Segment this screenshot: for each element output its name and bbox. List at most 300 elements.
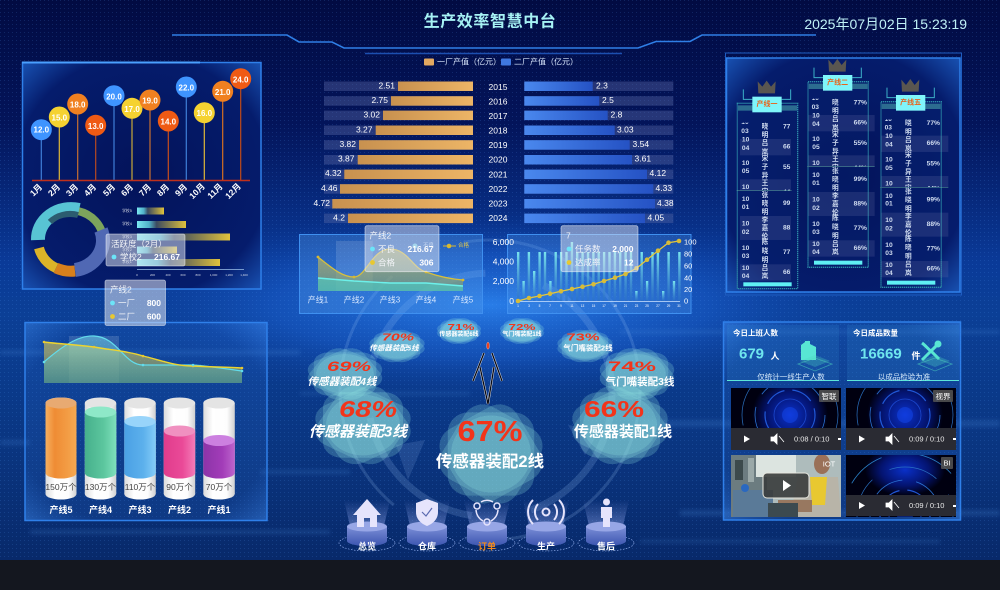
ranking column 2: 陈 bbox=[832, 213, 839, 222]
tooltip: day 7 tasks: 达成率 bbox=[575, 258, 601, 268]
cloud: 传感器装配3线 bbox=[308, 380, 418, 470]
nav: 生产: 生产 bbox=[537, 540, 555, 552]
ranking column 1: 伦 bbox=[762, 231, 769, 240]
ranking column 1: 宋 bbox=[762, 186, 769, 195]
ranking column 3: 03 bbox=[885, 124, 892, 131]
cylinders: 产线4 bbox=[89, 504, 112, 515]
tooltip: activity: 216.67 bbox=[154, 252, 180, 262]
ranking column 3: 吕 bbox=[905, 260, 912, 268]
school bars: 学校5 bbox=[122, 208, 132, 213]
stat card: staff on duty: 679 bbox=[739, 346, 764, 362]
ranking column 1 bbox=[737, 81, 798, 289]
cylinders bbox=[45, 398, 235, 515]
ranking column 2: 03 bbox=[812, 104, 819, 111]
video: BI: BI bbox=[943, 458, 951, 468]
tooltip: 产线2 quality: 不良 bbox=[378, 244, 396, 254]
ranking column 2 bbox=[807, 59, 875, 267]
cloud: 传感器装配1线: 传感器装配1线 bbox=[574, 422, 672, 440]
date and time: 2025年07月02日 15:23:19 bbox=[804, 16, 967, 32]
ranking column 2: 明 bbox=[832, 184, 839, 192]
butterfly bar chart: 4.38 bbox=[657, 198, 674, 208]
ranking column 2: 张 bbox=[832, 166, 839, 175]
panel: defect line chart: 产线2 bbox=[344, 294, 365, 304]
cloud: 气门嘴装配2线: 73% bbox=[566, 332, 600, 344]
ranking column 2: 66% bbox=[854, 245, 867, 252]
tooltip: 产线2 plants: 二厂 bbox=[118, 312, 135, 322]
ranking column 2: 王 bbox=[832, 155, 839, 163]
panel: line rankings bbox=[726, 53, 962, 295]
butterfly bar chart: 2015 bbox=[489, 82, 508, 92]
cloud: 传感器装配5线: 70% bbox=[382, 332, 414, 344]
butterfly bar chart: 4.2 bbox=[333, 212, 345, 222]
ranking column 1: 03 bbox=[742, 253, 750, 260]
lollipop chart: 18.0 bbox=[70, 100, 86, 110]
ranking column 3: 异 bbox=[905, 168, 912, 176]
cloud: 气门嘴装配3线: 74% bbox=[608, 358, 657, 374]
nav: 生产 bbox=[518, 500, 574, 552]
lollipop chart: 20.0 bbox=[106, 92, 122, 102]
ranking column 2: 晓 bbox=[832, 175, 839, 183]
nav: 售后: 售后 bbox=[597, 540, 615, 552]
ranking column 1: 02 bbox=[742, 229, 750, 236]
ranking column 1: 10 bbox=[742, 184, 750, 191]
ranking column 3: 44% bbox=[927, 185, 940, 192]
ranking column 1: 子 bbox=[762, 163, 769, 171]
tooltip: activity: 活跃度（2月） bbox=[111, 239, 167, 249]
school bars: 800 bbox=[195, 273, 201, 277]
panel: tasks bar and line chart: 0 bbox=[509, 296, 514, 306]
stat card: finished goods: 16669 bbox=[860, 346, 902, 362]
panel: daily stats and videos bbox=[722, 321, 962, 521]
ranking column 1: 10 bbox=[742, 245, 750, 252]
panel: tasks bar and line chart: 17 bbox=[602, 304, 606, 308]
panel: defect line chart: 产线4 bbox=[416, 294, 437, 304]
ranking column 2: 宋 bbox=[832, 129, 839, 138]
tooltip: 产线2 quality: 216.67 bbox=[408, 244, 434, 254]
ranking column 1: 岚 bbox=[762, 148, 769, 156]
stat card: staff on duty: 人 bbox=[770, 351, 780, 361]
ranking column 3: 嘉 bbox=[905, 219, 912, 228]
school bars: 学校4 bbox=[122, 221, 132, 226]
tooltip: activity bbox=[106, 234, 185, 266]
panel: tasks bar and line chart bbox=[493, 234, 697, 314]
panel: tasks bar and line chart: 20 bbox=[684, 285, 692, 294]
school bars: 1,000 bbox=[210, 273, 218, 277]
ranking column 1: 张 bbox=[762, 190, 769, 199]
tooltip: 产线2 quality: 合格 bbox=[378, 258, 396, 268]
butterfly bar chart: 4.12 bbox=[650, 168, 666, 178]
ranking column 3: 10 bbox=[885, 217, 893, 224]
tooltip: day 7 tasks bbox=[561, 226, 638, 272]
ranking column 2: 02 bbox=[812, 205, 820, 212]
panel: tasks bar and line chart: 2,000 bbox=[493, 276, 514, 286]
nav: 仓库 bbox=[399, 499, 455, 552]
butterfly bar chart bbox=[313, 80, 674, 223]
lollipop chart: 15.0 bbox=[52, 114, 68, 122]
ranking column 1: 10 bbox=[742, 136, 750, 143]
butterfly bar chart: 4.33 bbox=[656, 183, 672, 193]
butterfly bar chart: 2021 bbox=[489, 170, 508, 180]
panel: tasks bar and line chart: 23 bbox=[635, 304, 638, 308]
ranking column 1: 明 bbox=[762, 208, 769, 216]
ranking column 3: 晓 bbox=[905, 243, 912, 251]
panel: tasks bar and line chart: 5 bbox=[539, 304, 541, 308]
panel: tasks bar and line chart: 21 bbox=[624, 304, 627, 308]
butterfly bar chart: 3.27 bbox=[356, 124, 373, 134]
butterfly bar chart: 2.75 bbox=[371, 95, 388, 105]
ranking column 3: 99% bbox=[927, 196, 940, 203]
cylinders: 90万个 bbox=[166, 482, 193, 492]
ranking column 2: 99% bbox=[854, 176, 867, 183]
panel: tasks bar and line chart: 100 bbox=[684, 238, 697, 246]
title: 生产效率智慧中台 bbox=[424, 12, 556, 30]
ranking column 3: 李 bbox=[905, 211, 912, 220]
ranking column 3: 岚 bbox=[905, 269, 912, 277]
school bars: 学校1 bbox=[122, 259, 132, 264]
panel: defect line chart: 不良 bbox=[423, 241, 435, 249]
lollipop chart: 2月 bbox=[46, 182, 62, 198]
video: 视界: 0:09 / 0:10 bbox=[909, 434, 944, 444]
header lines bbox=[172, 35, 816, 54]
ranking column 1: 05 bbox=[742, 168, 750, 175]
lollipop chart: 12月 bbox=[223, 181, 243, 201]
butterfly bar chart: 3.02 bbox=[363, 110, 380, 120]
cylinders: 产线2 bbox=[168, 504, 191, 515]
ranking column 1: 66 bbox=[783, 269, 791, 276]
tooltip: 产线2 quality: 产线2 bbox=[370, 230, 392, 240]
ranking column 3: 子 bbox=[905, 159, 912, 167]
butterfly bar chart: 2016 bbox=[489, 96, 508, 106]
butterfly bar chart: 3.61 bbox=[634, 154, 651, 164]
stat card: staff on duty bbox=[727, 325, 839, 382]
cloud: 气门嘴装配2线: 气门嘴装配2线 bbox=[563, 342, 613, 352]
ranking column 2: 明 bbox=[832, 232, 839, 240]
butterfly bar chart: 2.51 bbox=[378, 80, 395, 90]
stat card: finished goods: 件 bbox=[911, 350, 921, 361]
ranking column 2: 10 bbox=[812, 95, 819, 102]
ranking column 1: 04 bbox=[742, 145, 750, 152]
ranking column 2: 10 bbox=[812, 221, 820, 228]
panel: production lines bbox=[25, 322, 267, 520]
lollipop chart: 19.0 bbox=[142, 96, 158, 106]
butterfly bar chart: 2.8 bbox=[610, 110, 623, 120]
cylinders: 70万个 bbox=[206, 482, 233, 492]
ranking column 3: 岚 bbox=[905, 144, 912, 152]
nav: 总览 bbox=[339, 499, 395, 552]
stat card: finished goods: 以成品检验为准 bbox=[878, 372, 931, 382]
lollipop chart: 11月 bbox=[205, 181, 225, 201]
tooltip: day 7 tasks: 任务数 bbox=[575, 244, 601, 254]
butterfly bar chart: 2018 bbox=[489, 126, 508, 136]
cloud: 气门嘴装配1线 bbox=[497, 316, 547, 346]
ranking column 3: 10 bbox=[885, 262, 893, 269]
ranking column 1: 88 bbox=[783, 224, 791, 231]
ranking column 1: 晓 bbox=[762, 247, 769, 255]
tooltip: 产线2 plants: 800 bbox=[147, 298, 161, 308]
ranking column 3: 10 bbox=[885, 180, 893, 187]
cloud: 传感器装配2线: 传感器装配2线 bbox=[436, 451, 545, 471]
butterfly bar chart: 3.82 bbox=[339, 139, 356, 149]
ranking column 3: 王 bbox=[905, 175, 912, 183]
panel: tasks bar and line chart: 15 bbox=[592, 304, 595, 308]
ranking column 2: 岚 bbox=[832, 248, 839, 256]
tooltip: day 7 tasks: 2,000 bbox=[612, 244, 634, 254]
cylinders: 130万个 bbox=[85, 482, 117, 492]
lollipop chart: 6月 bbox=[119, 182, 135, 198]
butterfly bar chart: 3.03 bbox=[617, 124, 634, 134]
ranking column 2: 88% bbox=[854, 200, 867, 207]
panel: tasks bar and line chart: 0 bbox=[684, 296, 688, 306]
lollipop chart: 3月 bbox=[64, 182, 80, 198]
butterfly bar chart: 3.87 bbox=[338, 154, 355, 164]
ranking column 2: 10 bbox=[812, 196, 820, 203]
ranking column 3: 产线五 bbox=[900, 97, 921, 106]
cloud: 传感器装配4线: 传感器装配4线 bbox=[308, 376, 378, 388]
panel: tasks bar and line chart: 40 bbox=[684, 274, 692, 282]
butterfly bar chart: 2.3 bbox=[596, 80, 608, 90]
ranking column 1: 10 bbox=[742, 196, 750, 203]
ranking column 1: 10 bbox=[741, 119, 749, 126]
ranking column 1: 10 bbox=[742, 160, 750, 167]
ranking column 3: 宋 bbox=[905, 183, 912, 192]
cylinders: 产线1 bbox=[207, 504, 231, 515]
cylinders: 110万个 bbox=[125, 482, 156, 492]
panel: tasks bar and line chart: 25 bbox=[645, 304, 649, 308]
butterfly bar chart: 2020 bbox=[489, 154, 508, 164]
butterfly bar chart: 4.05 bbox=[648, 212, 664, 222]
school bars: 200 bbox=[150, 273, 155, 277]
lollipop chart: 24.0 bbox=[233, 76, 249, 84]
stat card: staff on duty: 仅统计一线生产人数 bbox=[757, 372, 825, 382]
ranking column 1: 明 bbox=[762, 131, 769, 139]
panel: tasks bar and line chart: 19 bbox=[613, 304, 617, 308]
ranking column 2: 异 bbox=[832, 147, 839, 155]
nav: 订单: 订单 bbox=[478, 540, 496, 552]
ranking column 2: 03 bbox=[812, 229, 820, 236]
cloud: 传感器装配4线 bbox=[302, 344, 388, 404]
cloud: 气门嘴装配3线 bbox=[594, 344, 680, 404]
school bars: 1,200 bbox=[225, 273, 233, 277]
butterfly bar chart: 2023 bbox=[489, 198, 508, 208]
video: BI: 0:09 / 0:10 bbox=[909, 501, 944, 510]
ranking column 1: 吕 bbox=[762, 139, 768, 147]
panel: tasks bar and line chart: 6,000 bbox=[493, 237, 514, 247]
ranking column 1: 王 bbox=[762, 179, 769, 187]
panel: defect line chart: 产线3 bbox=[380, 294, 401, 304]
lollipop chart: 4月 bbox=[82, 182, 98, 198]
ranking column 2: 77% bbox=[854, 99, 867, 106]
nav: 售后 bbox=[578, 498, 634, 552]
ranking column 2: 岚 bbox=[832, 124, 839, 132]
school bars: 600 bbox=[180, 273, 186, 277]
ranking column 3: 明 bbox=[905, 128, 912, 136]
panel: tasks bar and line chart: 9 bbox=[560, 304, 562, 308]
lollipop chart: 14.0 bbox=[161, 118, 177, 126]
ranking column 2: 04 bbox=[812, 249, 820, 256]
ranking column 2: 66% bbox=[854, 119, 867, 126]
ranking column 2: 10 bbox=[812, 112, 820, 119]
panel: tasks bar and line chart: 29 bbox=[667, 304, 670, 308]
school bars: 400 bbox=[165, 273, 171, 277]
panel: tasks bar and line chart: 13 bbox=[581, 304, 584, 308]
ranking column 2: 10 bbox=[812, 136, 820, 143]
ranking column 3: 66% bbox=[927, 265, 940, 272]
ranking column 2: 嘉 bbox=[832, 199, 839, 208]
ranking column 3: 01 bbox=[885, 200, 893, 207]
cloud: 传感器装配3线: 68% bbox=[339, 396, 397, 422]
ranking column 2: 10 bbox=[812, 172, 820, 179]
lollipop chart: 5月 bbox=[101, 182, 117, 198]
cloud: 传感器装配2线: 67% bbox=[458, 416, 523, 448]
panel: tasks bar and line chart: 31 bbox=[677, 304, 681, 308]
ranking column 2: 产线二 bbox=[827, 77, 848, 86]
video: 智联: 0:08 / 0:10 bbox=[794, 434, 829, 444]
ranking column 1: 10 bbox=[742, 265, 750, 272]
tooltip: 产线2 plants: 一厂 bbox=[118, 298, 135, 308]
ranking column 3: 55% bbox=[927, 160, 940, 167]
ranking column 3: 晓 bbox=[905, 196, 912, 204]
ranking column 2: 10 bbox=[812, 160, 820, 167]
stat card: finished goods bbox=[847, 325, 959, 382]
ranking column 2: 05 bbox=[812, 144, 820, 151]
radial line-efficiency clouds bbox=[302, 316, 680, 511]
lollipop chart: 16.0 bbox=[197, 109, 213, 118]
cloud: 传感器装配6线: 传感器装配6线 bbox=[439, 330, 479, 338]
ranking column 1: 10 bbox=[742, 220, 750, 227]
panel: defect line chart: 产线1 bbox=[308, 294, 329, 304]
butterfly bar chart: 3.54 bbox=[632, 139, 649, 149]
lollipop chart: 21.0 bbox=[215, 88, 231, 97]
ranking column 3: 10 bbox=[885, 242, 893, 249]
ranking column 3: 张 bbox=[905, 186, 912, 195]
cloud: 传感器装配4线: 69% bbox=[327, 358, 372, 374]
cloud: 气门嘴装配1线: 气门嘴装配1线 bbox=[502, 330, 542, 338]
ranking column 1: 77 bbox=[783, 123, 791, 130]
ranking column 3: 04 bbox=[885, 270, 893, 277]
ranking column 3: 02 bbox=[885, 225, 893, 232]
ranking column 1: 吕 bbox=[762, 264, 768, 272]
school bars: 学校2 bbox=[122, 247, 132, 252]
panel: tasks bar and line chart: 1 bbox=[517, 304, 519, 308]
panel: defect line chart: 合格 bbox=[458, 241, 470, 249]
ranking column 1: 明 bbox=[762, 256, 769, 264]
ranking column 1: 66 bbox=[783, 143, 791, 150]
ranking column 3: 陈 bbox=[905, 234, 912, 243]
area chart bbox=[43, 336, 243, 383]
video: BI bbox=[846, 455, 956, 517]
ranking column 1: 03 bbox=[741, 128, 749, 135]
cylinders: 产线5 bbox=[49, 504, 73, 515]
ranking column 1: 产线一 bbox=[757, 99, 777, 108]
ranking column 2: 77% bbox=[854, 225, 867, 232]
ranking column 3: 10 bbox=[885, 193, 893, 200]
video: IOT: IOT bbox=[823, 460, 836, 468]
ranking column 1: 55 bbox=[783, 164, 791, 171]
tooltip: 产线2 plants bbox=[105, 280, 166, 326]
ranking column 3: 77% bbox=[927, 120, 940, 127]
ranking column 3: 明 bbox=[905, 205, 912, 213]
school bars: 0 bbox=[136, 273, 138, 277]
school bars bbox=[122, 208, 248, 277]
ranking column 2: 吕 bbox=[832, 240, 839, 248]
ranking column 3: 10 bbox=[885, 116, 892, 123]
cloud: 传感器装配5线: 传感器装配5线 bbox=[369, 344, 420, 352]
lollipop chart: 13.0 bbox=[88, 122, 104, 131]
tooltip: 产线2 plants: 600 bbox=[147, 312, 161, 322]
butterfly bar chart: 4.46 bbox=[321, 183, 338, 193]
legend: plant output: 一厂产值（亿元） bbox=[437, 56, 501, 66]
cloud: 传感器装配1线 bbox=[565, 380, 675, 470]
butterfly bar chart: 4.32 bbox=[325, 168, 342, 178]
cloud: 传感器装配6线: 71% bbox=[448, 322, 475, 332]
ranking column 1: 岚 bbox=[762, 272, 769, 280]
lollipop chart: 9月 bbox=[173, 182, 189, 198]
panel: defect line chart: 产线5 bbox=[453, 294, 474, 304]
lollipop chart: 10月 bbox=[187, 181, 207, 201]
panel: tasks bar and line chart: 11 bbox=[570, 304, 574, 308]
ranking column 1: 99 bbox=[783, 200, 791, 207]
ranking column 2: 李 bbox=[832, 191, 839, 200]
3D donut chart bbox=[38, 209, 103, 271]
cloud: 传感器装配2线 bbox=[432, 397, 550, 511]
ranking column 2: 44% bbox=[854, 165, 867, 172]
ranking column 2: 明 bbox=[832, 107, 839, 115]
video: 视界: 视界 bbox=[936, 391, 951, 401]
ranking column 3 bbox=[880, 79, 948, 287]
cloud: 传感器装配5线 bbox=[365, 327, 429, 365]
ranking column 1: 晓 bbox=[762, 199, 769, 207]
school bars: 学校3 bbox=[122, 234, 132, 239]
cloud: 气门嘴装配1线: 72% bbox=[508, 322, 536, 332]
ranking column 3: 05 bbox=[885, 165, 893, 172]
ranking column 3: 10 bbox=[885, 133, 893, 140]
tooltip: 产线2 quality: 306 bbox=[419, 258, 434, 268]
butterfly bar chart: 2024 bbox=[489, 213, 508, 223]
panel: tasks bar and line chart: 7 bbox=[549, 304, 551, 308]
tooltip: activity: 学校2 bbox=[120, 252, 142, 262]
cloud: 气门嘴装配3线: 气门嘴装配3线 bbox=[606, 375, 675, 388]
tooltip: day 7 tasks: 12 bbox=[624, 258, 634, 268]
video: IOT bbox=[731, 454, 841, 517]
ranking column 3: 宋 bbox=[905, 150, 912, 159]
panel: tasks bar and line chart: 80 bbox=[684, 250, 692, 258]
ranking column 1: 01 bbox=[742, 204, 750, 211]
ranking column 1: 晓 bbox=[762, 122, 769, 130]
ranking column 1: 李 bbox=[762, 215, 769, 224]
ranking column 1: 嘉 bbox=[762, 223, 769, 232]
video: 智联: 智联 bbox=[822, 391, 837, 401]
ranking column 2: 55% bbox=[854, 140, 867, 147]
ranking column 3: 伦 bbox=[905, 228, 912, 237]
cylinders: 150万个 bbox=[45, 482, 77, 492]
stat card: staff on duty: 今日上班人数 bbox=[733, 328, 778, 338]
panel: tasks bar and line chart: 60 bbox=[684, 262, 692, 270]
lollipop chart: 1月 bbox=[28, 182, 44, 198]
stat card: finished goods: 今日成品数量 bbox=[853, 328, 898, 338]
panel: tasks bar and line chart: 3 bbox=[528, 304, 530, 308]
butterfly bar chart: 2.5 bbox=[602, 95, 614, 105]
lollipop chart: 8月 bbox=[155, 182, 171, 198]
legend: plant output: 二厂产值（亿元） bbox=[514, 56, 578, 66]
ranking column 1: 77 bbox=[783, 249, 791, 256]
ranking column 1: 44 bbox=[783, 189, 791, 196]
ranking column 1: 宋 bbox=[762, 153, 769, 162]
cloud: 传感器装配1线: 66% bbox=[584, 396, 644, 422]
ranking column 2: 伦 bbox=[832, 207, 839, 216]
butterfly bar chart: 2017 bbox=[489, 111, 508, 121]
video: 视界 bbox=[846, 388, 956, 450]
ranking column 1: 04 bbox=[742, 273, 750, 280]
